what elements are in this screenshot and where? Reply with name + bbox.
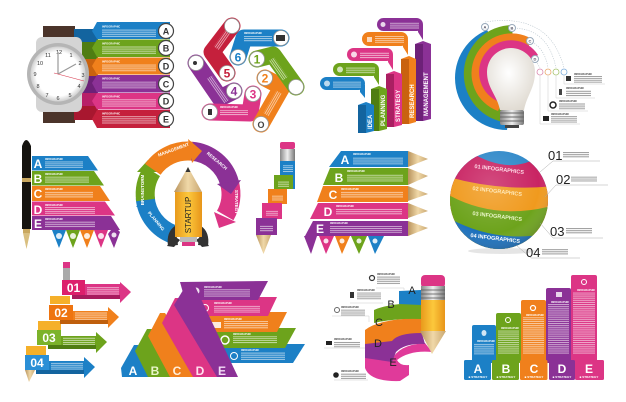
ribbon E: INFOGRAPHIC [330,221,348,225]
bar: planning: PLANNING [381,94,387,126]
step: purple [256,218,277,235]
caption blocks: INFOGRAPHIC [334,337,352,341]
speech bubble: strategy [347,48,393,70]
band: purple E [174,282,238,378]
base E: E [585,362,593,376]
column E: INFOGRAPHIC [577,288,595,292]
letter badges: C [163,80,170,90]
ribbon: blue E [210,344,305,363]
ribbon: green D [200,328,296,348]
letter badges: E [163,114,169,124]
badge numerals: 5 [224,66,231,80]
panel: 3D bar chart with bubbles [320,18,431,133]
step: orange [268,189,287,204]
arrow 01: 01 [67,281,80,295]
letters: A [408,285,416,297]
pencil eraser and ferrule [280,142,295,161]
base B: ■ STRATEGY [497,375,515,379]
ribbon B: B [34,172,43,186]
arc arrow: brainstorm [137,160,160,200]
band text lines: INFOGRAPHIC [244,31,262,35]
ribbon A [92,22,170,39]
ribbon A: INFOGRAPHIC [353,152,371,156]
bar: strategy: STRATEGY [396,90,402,122]
icon: watch face: 2 [78,61,82,67]
layer: green [374,303,421,323]
ribbon C: INFOGRAPHIC [45,187,63,191]
sphere shadow [468,248,536,254]
icon: watch face [27,37,89,112]
arc: blue [455,30,515,130]
caption blocks: INFOGRAPHIC [341,369,359,373]
bar: research: RESEARCH [410,84,416,118]
caption blocks: INFOGRAPHIC [341,305,359,309]
letters: B [387,299,395,311]
ribbon B: INFOGRAPHIC [102,42,120,46]
ribbon D [310,203,408,219]
base D: ■ STRATEGY [553,375,571,379]
layer: blue [399,290,421,305]
ring labels: RESEARCH [206,151,228,171]
ribbon: pink B [180,297,277,316]
base A: A [474,362,483,376]
band: blue A [121,345,161,378]
icon: watch face: 3 [81,73,85,79]
ribbon: blue E: INFOGRAPHIC [241,348,259,352]
panel: pencil spiral [324,272,446,381]
number and icon badges [188,18,304,132]
arc arrow: strategy [214,183,236,228]
pin icons [304,236,384,254]
panel: watch infographic [27,22,174,128]
band: pink 3 [210,94,253,113]
ribbon A: INFOGRAPHIC [102,24,120,28]
badge numerals: O [257,120,265,130]
arc: green [464,25,515,122]
pencil tip [25,370,35,382]
ribbon A: INFOGRAPHIC [45,157,63,161]
badge numerals: 6 [235,50,242,64]
ribbon C [317,186,408,202]
ribbon B [323,168,408,185]
caption blocks [324,272,404,380]
base A: ■ STRATEGY [469,375,487,379]
band: green B: B [151,364,160,378]
band text lines [207,30,288,116]
icon: watch face: 7 [45,93,49,99]
ribbon F: INFOGRAPHIC [102,112,120,116]
panel: light bulb arcs [455,20,605,130]
badge numerals: 1 [254,52,261,66]
callout 03: 03 [550,224,564,239]
letter dots: A [484,24,487,30]
sphere labels: 04 INFOGRAPHICS [470,233,521,245]
letter dots: B [511,26,514,30]
sphere labels: 03 INFOGRAPHICS [472,211,523,223]
ribbon A [329,151,408,167]
ribbon C [32,186,110,201]
icon: watch face: 8 [36,84,40,90]
ribbon E: INFOGRAPHIC [45,217,63,221]
ribbon D: INFOGRAPHIC [102,76,120,80]
pencil tips [408,151,428,236]
band: orange C [148,313,206,378]
ribbon C: C [329,188,338,202]
ribbon B [92,40,170,57]
letters [374,285,416,369]
caption blocks [543,72,602,123]
badge numerals: 3 [250,88,257,102]
ribbon C: INFOGRAPHIC [341,187,359,191]
pencil cap [63,262,70,280]
caption blocks: INFOGRAPHIC [377,272,395,276]
icon: pencil [420,275,446,354]
letter badges: D [163,96,170,106]
speech bubble: management [377,18,423,40]
callout 04: 04 [526,245,540,260]
sphere labels: 02 INFOGRAPHICS [472,186,523,198]
icon: light bulb [487,48,535,128]
panel: stepped pencil [256,142,295,254]
panel: pyramid ribbons [121,281,305,378]
ribbon D: D [34,203,43,217]
column C: INFOGRAPHIC [526,313,544,317]
ribbon: green D: INFOGRAPHIC [233,332,251,336]
sphere labels: 01 INFOGRAPHICS [474,164,525,176]
ribbon D: D [324,205,333,219]
leader circles [537,69,567,75]
caption blocks: INFOGRAPHIC [566,86,584,90]
ribbon D: INFOGRAPHIC [45,203,63,207]
ribbon A [32,156,98,171]
icon: watch face: 12 [56,50,62,56]
ribbon: purple A [180,281,268,300]
ring labels: BRAINSTORM [140,175,145,205]
layer: purple [365,330,425,362]
speech bubble: research [362,32,408,55]
sphere labels [470,164,525,245]
panel: startup rocket ring [136,139,241,247]
letter badges [158,24,174,126]
column B: INFOGRAPHIC [501,326,519,330]
ribbon D [92,75,170,92]
ribbon E: E [34,217,42,231]
step: green [274,175,293,189]
icon: watch face: 10 [37,61,43,67]
ribbon E [305,221,408,236]
band: purple 4 [196,63,234,98]
ribbon C: INFOGRAPHIC [102,60,120,64]
callout 01 [548,148,589,163]
icon: watch strap [43,26,75,123]
ribbon: purple A: INFOGRAPHIC [204,285,222,289]
speech bubble: planning [333,63,379,85]
badge numerals: 2 [262,72,269,86]
panel: pencil ribbons [304,151,428,254]
letters: E [389,357,397,369]
ribbon E: INFOGRAPHIC [102,94,120,98]
letter badges: B [163,44,170,54]
arc arrow: management [153,139,202,169]
letters: D [374,338,382,350]
badge numerals: 4 [231,84,238,98]
letter badges: A [163,26,170,36]
step: blue [280,161,295,189]
band: blue 6 [238,38,281,57]
band: blue A: A [129,364,138,378]
band: red 5 [212,26,232,73]
base D: D [558,362,567,376]
icon: watch face: 4 [77,84,81,90]
panel: stair arrows [25,262,131,382]
caption blocks: INFOGRAPHIC [357,288,375,292]
letters: C [375,317,383,329]
ribbon A: A [34,157,43,171]
base D [549,360,575,380]
stair connectors [26,296,70,355]
base C: C [530,362,539,376]
band: orange C: C [173,364,182,378]
ribbon B: INFOGRAPHIC [347,169,365,173]
callout 03 [550,224,592,239]
letter dots: D [534,56,537,62]
band: green 1 [257,55,296,87]
ring labels: STRATEGY [234,190,239,214]
panel: fountain pen ribbons [22,140,120,249]
arc: pink [479,40,538,101]
dashed leader arcs [485,20,564,68]
icon: fountain pen [22,140,31,249]
ribbon F [92,110,170,128]
ring labels: MANAGEMENT [157,142,190,158]
arc: orange [471,33,532,111]
band: green B [135,329,183,378]
step: pink [262,203,282,219]
base B [492,360,519,380]
base B: B [502,362,511,376]
ribbon E: E [316,222,324,236]
base E: ■ STRATEGY [580,375,598,379]
panel: hexagon swirl [188,18,304,132]
fold strips behind watch [74,29,98,120]
icon: watch face: 5 [68,93,72,99]
ribbon B: B [335,171,344,185]
pencil tip [256,235,271,254]
icon: watch face: 11 [45,53,51,59]
icon: watch face: 6 [56,96,60,102]
ribbon B: INFOGRAPHIC [45,172,63,176]
base A [464,360,491,380]
ribbon D: INFOGRAPHIC [336,204,354,208]
ribbon: orange C [190,312,287,332]
arc arrow: planning [136,197,173,234]
base C: ■ STRATEGY [525,375,543,379]
band text lines: INFOGRAPHIC [220,105,238,109]
sphere bands [450,151,548,249]
caption blocks: INFOGRAPHIC [551,112,569,116]
callout 02: 02 [556,172,570,187]
callout 01: 01 [548,148,562,163]
ring labels: PLANNING [147,210,166,232]
base C [520,360,548,380]
arrow 02: 02 [54,306,68,320]
ribbon: orange C: INFOGRAPHIC [224,317,242,321]
ribbon B [32,171,104,186]
icon: watch face: 1 [69,53,73,59]
bar: management: MANAGEMENT [424,72,430,116]
leader lines [540,75,605,124]
ribbon D [32,202,115,217]
callout 04 [526,245,568,260]
pin icons [52,226,120,248]
band: pink D: D [196,364,205,378]
icon: watch face: 9 [33,72,37,78]
arrow 04: 04 [30,356,44,370]
ribbon A: A [341,153,350,167]
bar: idea: IDEA [368,114,374,129]
layer: orange [365,318,421,344]
ribbon E [32,216,120,231]
callout 02 [556,172,597,187]
speech bubble: idea [320,77,365,98]
panel: strategy columns [464,275,604,380]
column A: INFOGRAPHIC [477,339,495,343]
band: purple E: E [218,364,226,378]
letter badges: D [163,62,170,72]
callout lines [516,161,608,258]
caption blocks: INFOGRAPHIC [574,72,592,76]
letter dots: C [529,38,532,44]
layer: pink [365,343,432,381]
arc arrow: research [192,151,241,194]
caption blocks: INFOGRAPHIC [559,99,577,103]
ribbon E [92,93,170,110]
panel: sphere [450,151,608,258]
icon: pencil rocket: STARTUP [184,197,193,233]
band: orange 2 [261,78,282,124]
ring labels [140,142,239,232]
column D: INFOGRAPHIC [551,300,569,304]
base E [575,360,604,380]
badge numerals [193,35,285,130]
band: pink D [162,298,229,378]
arrow 03: 03 [42,331,56,345]
ribbon: pink B: INFOGRAPHIC [214,301,232,305]
letter dots [482,24,538,62]
ribbon C: C [34,187,43,201]
ribbon C [92,58,170,74]
